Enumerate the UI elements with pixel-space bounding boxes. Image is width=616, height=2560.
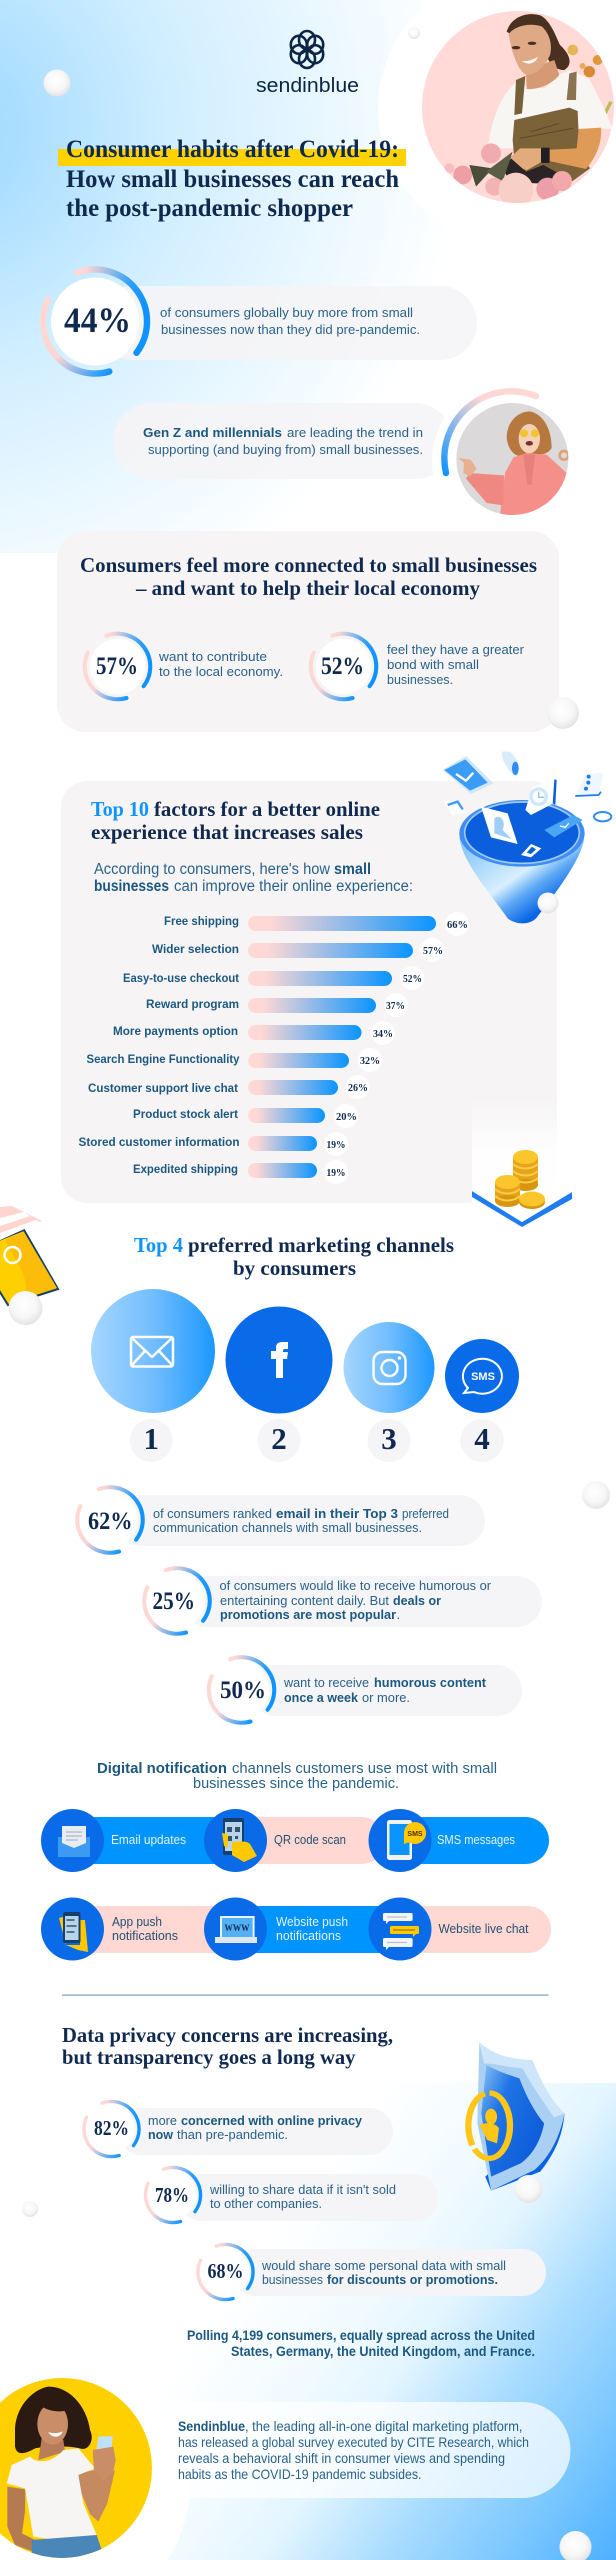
heading: experience that increases sales [91,820,363,844]
stat: 57%: to the local economy. [159,664,283,679]
icon: shield [468,2042,565,2191]
stat: 57%: 57% [96,653,138,680]
stat: 44%: 44% [64,300,131,340]
bar: product stock alert [133,1104,358,1128]
icon: SMS phone [368,1809,432,1872]
pill: website push notifications [235,1906,415,1953]
bar chart [78,912,469,1184]
pill: app push notifications: App push [112,1914,162,1929]
bar: reward program [146,993,408,1017]
title: Consumer habits after Covid-19: [66,136,399,163]
stat: 44% [43,269,477,374]
intro text: businesses [94,878,169,895]
bar: customer support live chat: 26% [348,1082,368,1094]
decorative ball: bottom right [560,2531,592,2560]
stat: 68%: would share some personal data with small [261,2258,506,2273]
stat: 52%: 52% [321,653,364,680]
pill: website push notifications: Website push [276,1914,348,1929]
channel 2: facebook: 2 [271,1421,287,1456]
stat: 25% [144,1568,542,1634]
heading: data privacy: Data privacy concerns are increasing, [62,2023,393,2047]
icon: laptop www: WWW [224,1923,250,1933]
bar: customer support live chat: Customer support live chat [88,1081,238,1095]
background: top gradient [0,0,616,553]
icon: chat bubbles [368,1898,432,1960]
heading: digital notification channels: businesses since the pandemic. [193,1775,399,1792]
heading: data privacy: but transparency goes a long way [62,2045,356,2069]
stat: 62%: communication channels with small businesses. [153,1520,422,1535]
heading: data privacy [62,2023,393,2069]
bar: more payments option: More payments option [113,1024,238,1038]
heading [80,553,537,600]
stat: 25%: of consumers would like to receive humorous or [220,1578,492,1593]
panel: about sendinblue: Sendinblue [178,2418,245,2434]
stat: 62% [77,1487,485,1553]
bar: customer support live chat [88,1075,370,1099]
bar: free shipping [164,912,469,936]
bar: easy checkout: Easy-to-use checkout [123,971,239,985]
decorative ball: near florist [408,27,420,39]
decorative ball: funnel [538,892,558,914]
stat: 52%: feel they have a greater [387,642,525,657]
pill: website live chat [400,1906,551,1953]
photo: woman with phone [0,2378,152,2560]
decorative ball: store [8,1291,42,1325]
stat: 52% [311,634,525,699]
stat: 82%: concerned with online privacy [181,2113,363,2128]
pill: email updates [72,1817,242,1864]
pill: QR code scan [235,1817,385,1864]
stat: 50%: 50% [220,1677,266,1704]
heading: digital notification channels: Digital notification [97,1760,227,1777]
bar: easy checkout [123,966,424,990]
illustration: fade behind coins [472,1097,570,1203]
stat: 62%: preferred [402,1506,449,1521]
decorative ball: panel corner [547,697,579,729]
stat: Gen Z and millennials: Gen Z and millennials [143,425,282,440]
title: How small businesses can reach [66,166,399,193]
bar: expedited shipping [133,1160,348,1184]
stat: 82%: than pre-pandemic. [177,2127,288,2142]
bar: search engine functionality: Search Engine Functionality [86,1052,240,1066]
heading: Consumers feel more connected to small businesses [80,553,537,577]
panel: about sendinblue [130,2402,570,2498]
photo: florist [422,11,614,207]
stat: 78%: willing to share data if it isn't sold [209,2182,396,2197]
stat: 82%: now [148,2127,174,2142]
text: polling note: States, Germany, the United Kingdom, and France. [231,2343,535,2359]
icon: logo spiral [291,31,323,68]
bar: stored customer information: Stored customer information [78,1135,240,1149]
panel: about sendinblue: habits as the COVID-19 pandemic subsides. [178,2466,422,2482]
stat: 82% [84,2101,393,2157]
stat: Gen Z and millennials [113,388,568,515]
bar: stored customer information: 19% [326,1139,346,1151]
icon: funnel with flying cards [443,752,611,923]
stat: 82%: more [148,2113,177,2128]
bar: expedited shipping: Expedited shipping [133,1162,238,1176]
pill: app push notifications [72,1906,247,1953]
icon: coins on platform [472,1150,572,1227]
heading: top 4 channels: preferred marketing channels [188,1233,454,1257]
photo: young woman in pink hoodie [456,403,568,516]
white circle behind florist [378,0,616,242]
stat: 78%: to other companies. [210,2196,322,2211]
stat: 68%: 68% [208,2259,244,2283]
pill: QR code scan: QR code scan [274,1832,346,1847]
stat: 50%: humorous content [374,1675,487,1690]
bar: free shipping: Free shipping [164,914,239,928]
heading: top 4 channels [134,1233,454,1280]
stat: 50% [209,1657,522,1723]
panel: about sendinblue: , the leading all-in-one digital marketing platform, [245,2418,522,2434]
bar: free shipping: 66% [447,919,468,931]
panel: about sendinblue: has released a global survey executed by CITE Research, which [178,2434,529,2450]
stat: 62%: of consumers ranked [153,1506,272,1521]
stat: 50%: or more. [362,1690,410,1705]
stat: 44%: of consumers globally buy more from small [160,305,413,320]
intro text: small [334,861,371,878]
bar: wider selection [152,938,444,962]
bar: more payments option: 34% [373,1028,393,1040]
stat: 62%: email in their Top 3 [276,1506,398,1521]
bar: product stock alert: Product stock alert [133,1107,238,1121]
channel 1: email [91,1289,215,1462]
bar: stored customer information [78,1132,348,1156]
bar: easy checkout: 52% [403,973,422,985]
pill: email updates: Email updates [111,1832,186,1847]
icon: app push [41,1898,104,1960]
icon: email updates [41,1809,104,1872]
stat: 68% [198,2244,546,2300]
stat: 78%: 78% [155,2183,189,2207]
bar: search engine functionality: 32% [360,1055,380,1067]
bar: search engine functionality [86,1048,382,1072]
icon: QR code scan [204,1809,267,1872]
bar: wider selection: Wider selection [152,942,239,956]
heading: top 4 channels: by consumers [233,1256,356,1280]
notification pills: row 2 [41,1898,551,1960]
decorative ball: left [22,2201,38,2217]
stat: 57%: want to contribute [158,649,267,664]
panel: about sendinblue: reveals a behavioral shift in consumer views and spending [178,2450,505,2466]
icon: yellow store phone [0,1206,58,1305]
channel 4: SMS: 4 [474,1421,490,1456]
stat: 50%: want to receive [283,1675,369,1690]
bar: more payments option [113,1021,395,1045]
channel 4: SMS: SMS [471,1371,495,1383]
logo wordmark: sendinblue [256,75,359,97]
title highlight [58,149,406,166]
notification pills: row 1 [41,1809,549,1872]
heading: digital notification channels: channels customers use most with small [232,1760,497,1777]
stat: 82%: 82% [94,2116,129,2140]
stat: 25%: 25% [152,1588,195,1615]
pill: app push notifications: notifications [112,1928,178,1943]
channel 4: SMS [445,1339,519,1462]
decorative ball: shield [514,2175,542,2203]
pill: SMS messages: SMS messages [437,1832,515,1847]
text: polling note [187,2327,535,2359]
background: bottom gradient [0,2083,616,2560]
stat: 62%: 62% [88,1508,132,1535]
bar: reward program: 37% [386,1000,405,1012]
heading: factors for a better online [154,797,380,821]
heading: Top 10 [91,797,149,821]
stat: 25%: deals or [393,1593,441,1608]
stat: 78% [145,2167,438,2223]
stat: 52%: businesses. [387,672,453,687]
intro text [94,861,413,895]
stat: 25%: . [396,1607,400,1622]
stat: 44%: businesses now than they did pre-pandemic. [161,322,420,337]
text: polling note: Polling 4,199 consumers, equally spread across the United [187,2327,535,2343]
stat: 25%: promotions are most popular [220,1607,396,1622]
bar: product stock alert: 20% [336,1111,357,1123]
panel: connected to small businesses [57,531,559,732]
icon: laptop www [204,1898,267,1960]
heading: top 4 channels: Top 4 [134,1233,183,1257]
pill: website push notifications: notifications [276,1928,341,1943]
white circle behind woman [0,2339,190,2560]
icon: SMS phone: SMS [407,1831,423,1838]
stat: 50%: once a week [284,1690,359,1705]
decorative ball: top left [44,70,70,96]
stat: 52%: bond with small [387,657,479,672]
bar: expedited shipping: 19% [326,1167,346,1179]
channel 3: instagram: 3 [381,1421,397,1456]
pill: SMS messages [400,1817,549,1864]
title [58,136,406,222]
channel 3: instagram [344,1322,434,1462]
stat: 57% [85,634,283,699]
logo: sendinblue [256,31,359,97]
panel: top 10 factors [61,781,557,1203]
stat: 68%: businesses [262,2272,323,2287]
intro text: can improve their online experience: [174,878,413,895]
bar: reward program: Reward program [146,997,239,1011]
channel 2: facebook [226,1306,332,1462]
channel 1: email: 1 [144,1421,159,1456]
heading: – and want to help their local economy [135,576,480,600]
pill: website live chat: Website live chat [438,1921,529,1936]
intro text: According to consumers, here's how [94,861,331,878]
stat: 25%: entertaining content daily. But [220,1593,389,1608]
bar: wider selection: 57% [423,945,443,957]
decorative ball: right [582,1481,610,1509]
stat: 68%: for discounts or promotions. [327,2272,498,2287]
heading [91,797,380,844]
stat: Gen Z and millennials: supporting (and buying from) small businesses. [148,442,423,457]
heading: digital notification channels [97,1760,497,1792]
title: the post-pandemic shopper [66,195,353,222]
stat: Gen Z and millennials: are leading the trend in [287,425,423,440]
